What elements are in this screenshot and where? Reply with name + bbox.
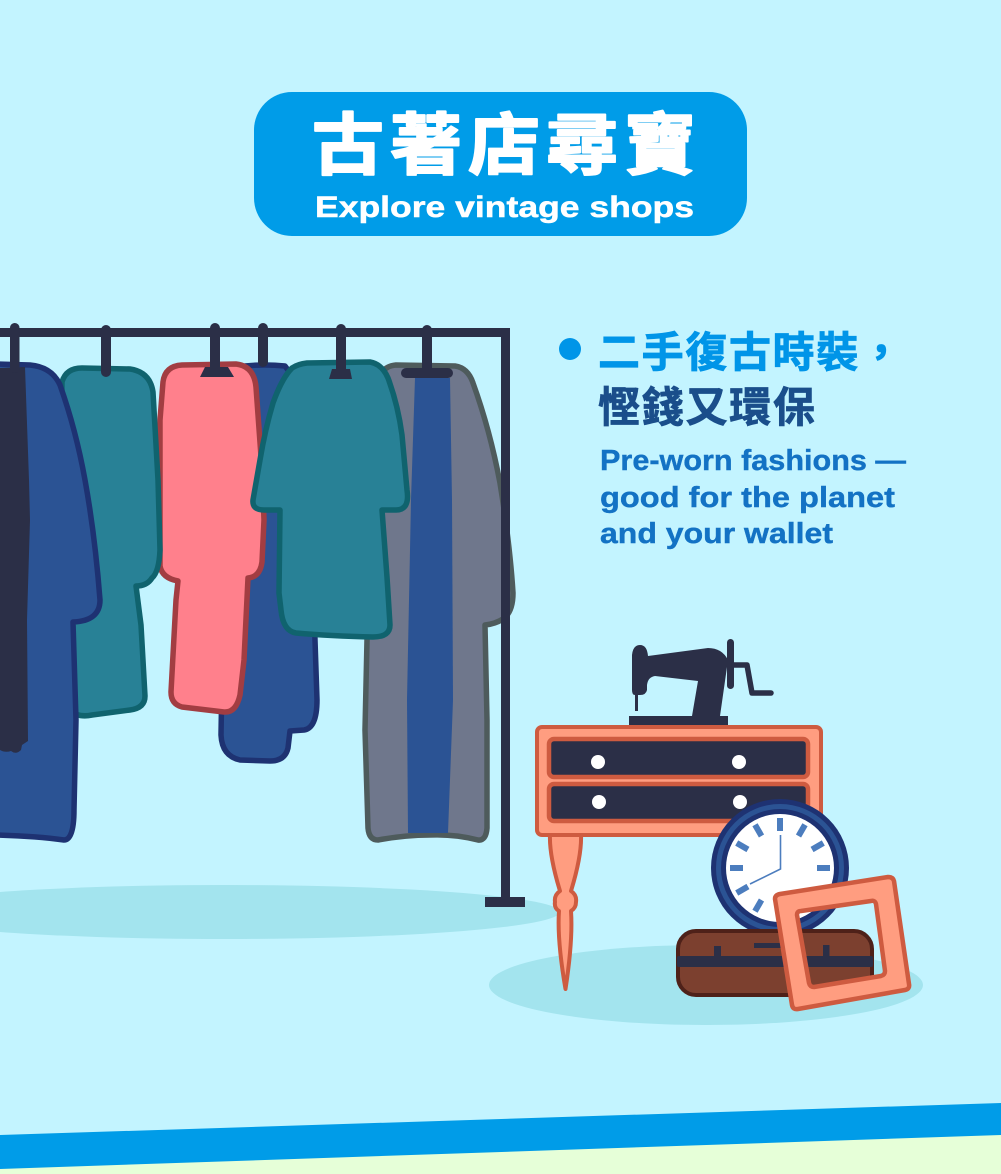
- icon: picture frame: [775, 877, 909, 1009]
- garment: grey coat: [365, 365, 513, 840]
- rack frame: [0, 328, 525, 907]
- icon: sewing machine: [629, 639, 771, 726]
- floor shadow: furniture: [489, 945, 923, 1025]
- English description: [600, 445, 906, 550]
- icon: suitcase: [677, 931, 873, 995]
- clothes rack with garments: [0, 323, 525, 907]
- garment: blue coat, middle: [221, 365, 317, 761]
- garment: pink dress: [160, 364, 264, 712]
- garment: blue coat, left: [0, 364, 100, 840]
- garment: teal dress, front: [253, 362, 408, 637]
- English description: good for the planet: [600, 482, 895, 514]
- drawer: bottom: [549, 784, 808, 821]
- floor shadow: clothes rack: [0, 885, 560, 939]
- table with drawers: [537, 727, 821, 835]
- text block: bullet point: [559, 329, 906, 550]
- bottom ground strip: [0, 1103, 1001, 1174]
- title: English: Explore vintage shops: [315, 191, 694, 224]
- drawer: top: [549, 739, 808, 777]
- title badge: [254, 92, 747, 236]
- heading line 1: 二手復古時裝，: [598, 329, 902, 376]
- drawer knobs: [591, 755, 747, 809]
- table leg: [550, 834, 581, 989]
- English description: and your wallet: [600, 518, 833, 550]
- heading line 2: 慳錢又環保: [598, 384, 815, 431]
- icon: clock: [711, 799, 849, 937]
- garment: teal top, left: [60, 368, 160, 716]
- English description: Pre-worn fashions —: [600, 445, 906, 477]
- hangers: [10, 323, 453, 379]
- garment: dark scarf: [0, 367, 30, 753]
- bullet dot: [559, 338, 581, 360]
- title: Chinese: 古著店尋寶: [312, 108, 702, 184]
